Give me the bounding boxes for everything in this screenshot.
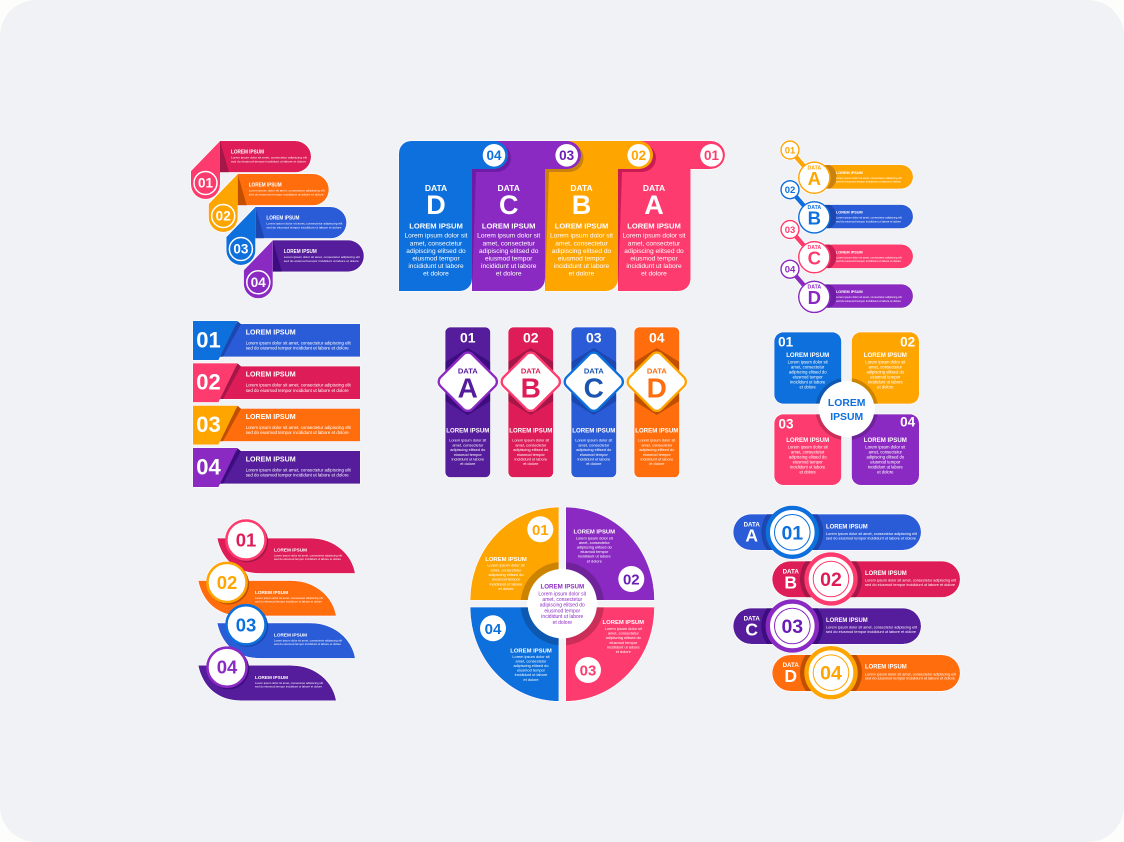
bar D: sed do eiusmod tempor incididunt ut labore et dolore <box>836 299 902 303</box>
square 01 <box>774 332 841 404</box>
square 03: LOREM IPSUM <box>786 437 829 444</box>
ribbon 01 <box>191 141 311 199</box>
center hub: amet, consectetur <box>542 597 583 603</box>
panel: four squares around a circle <box>774 332 919 485</box>
bar A: sed do eiusmod tempor incididunt ut labore et dolore <box>836 180 902 184</box>
column B: DATA <box>570 183 593 193</box>
ribbon 04: sed do eiusmod tempor incididunt ut labore et dolore <box>284 259 359 263</box>
square 02: et dolore <box>877 384 894 389</box>
quadrant 01: eiusmod tempor <box>492 577 521 582</box>
quadrant 02: Lorem ipsum dolor sit <box>576 535 614 540</box>
square 02: eiusmod tempor <box>870 374 901 379</box>
pill 02: Lorem ipsum dolor sit amet, consectetur adipiscing elit <box>865 579 956 583</box>
banner 02: 02 <box>196 370 221 395</box>
bar A: LOREM IPSUM <box>836 171 863 175</box>
column B: amet, consectetur <box>515 442 547 447</box>
banner 01: LOREM IPSUM <box>246 327 296 336</box>
square 01: incididunt ut labore <box>790 379 826 384</box>
quadrant 03: et dolore <box>616 649 631 654</box>
pill 04: DATA <box>783 662 799 669</box>
square 04: Lorem ipsum dolor sit <box>865 444 906 449</box>
bar C: LOREM IPSUM <box>836 250 863 254</box>
ribbon 03: Lorem ipsum dolor sit amet, consectetur adipiscing elit <box>266 222 343 226</box>
ribbon 02 <box>209 174 329 232</box>
swoosh 03 <box>217 605 355 658</box>
column C: 03 <box>559 148 575 163</box>
square 01: eiusmod tempor <box>793 374 823 379</box>
bar D: D <box>808 287 821 308</box>
banner 03: Lorem ipsum dolor sit amet, consectetur adipiscing elit <box>246 425 351 430</box>
column D: amet, consectetur <box>641 442 673 447</box>
square 02: amet, consectetur <box>869 364 903 369</box>
square 01: adipiscing elitsed do <box>789 369 827 374</box>
quadrant 04: incididunt ut labore <box>515 672 547 677</box>
column D: eiusmod tempor <box>412 256 460 262</box>
column C: 03 <box>586 329 602 345</box>
square 04: LOREM IPSUM <box>864 437 907 444</box>
bar B: 02 <box>785 185 795 196</box>
column B: Lorem ipsum dolor sit <box>550 233 613 240</box>
quadrant 02: LOREM IPSUM <box>574 529 615 535</box>
panel: linked circle bars <box>781 141 913 312</box>
quadrant 04: adipiscing elitsed do <box>513 663 549 668</box>
column B: B <box>572 190 591 220</box>
pill 03: LOREM IPSUM <box>826 617 868 624</box>
quadrant 04: LOREM IPSUM <box>510 648 552 654</box>
column A: amet, consectetur <box>628 240 681 247</box>
swoosh 01: 01 <box>236 530 256 550</box>
square 04: eiusmod tempor <box>870 459 901 464</box>
swoosh 04 <box>198 648 336 700</box>
pill 02 <box>772 552 960 606</box>
bar D <box>781 260 913 312</box>
center hub: LOREM IPSUM <box>540 583 584 590</box>
column C <box>562 327 626 477</box>
column A: 01 <box>460 329 476 345</box>
column B: LOREM IPSUM <box>555 221 608 230</box>
column B <box>499 327 563 477</box>
ribbon 03 <box>226 207 346 265</box>
bar A <box>781 141 913 193</box>
center hub: adipiscing elitsed do <box>540 603 585 609</box>
quadrant 03: LOREM IPSUM <box>603 620 644 626</box>
column B: adipiscing elitsed do <box>513 447 548 452</box>
center hub: Lorem ipsum dolor sit <box>538 591 587 597</box>
quadrant 04: et dolore <box>523 677 539 682</box>
square 02: Lorem ipsum dolor sit <box>865 359 906 364</box>
bar C: DATA <box>807 245 821 251</box>
pill 04: sed do eiusmod tempor incididunt ut labore et dolore <box>865 677 955 681</box>
column D: incididunt ut labore <box>408 263 464 270</box>
pill 02: LOREM IPSUM <box>865 570 907 577</box>
ribbon 03: sed do eiusmod tempor incididunt ut labore et dolore <box>266 226 342 230</box>
pill 03: sed do eiusmod tempor incididunt ut labore et dolore <box>826 630 916 634</box>
square 03: eiusmod tempor <box>793 459 823 464</box>
swoosh 04: LOREM IPSUM <box>255 675 288 681</box>
column A <box>618 141 725 291</box>
column B: et dolore <box>523 461 538 466</box>
swoosh 03: LOREM IPSUM <box>274 633 307 639</box>
column C: adipiscing elitsed do <box>576 447 611 452</box>
pill 04: LOREM IPSUM <box>865 664 907 671</box>
column B: B <box>521 372 541 403</box>
column A: eiusmod tempor <box>630 256 678 262</box>
banner 02: LOREM IPSUM <box>246 370 296 379</box>
pill 01: Lorem ipsum dolor sit amet, consectetur adipiscing elit <box>826 532 917 536</box>
square 04: et dolore <box>877 469 894 474</box>
banner 02: Lorem ipsum dolor sit amet, consectetur adipiscing elit <box>246 383 351 388</box>
quadrant 04 <box>470 607 559 701</box>
column D <box>625 327 689 477</box>
banner 02 <box>193 363 360 402</box>
square 04: incididunt ut labore <box>868 464 904 469</box>
column B: adipiscing elitsed do <box>552 248 612 255</box>
pill 03: C <box>745 619 758 639</box>
column D: D <box>426 190 446 220</box>
ribbon 02: 02 <box>216 209 231 224</box>
swoosh 03: Lorem ipsum dolor sit amet, consectetur adipiscing elit <box>274 639 342 643</box>
column C: C <box>584 372 604 403</box>
column A: Lorem ipsum dolor sit <box>449 438 487 443</box>
bar B: Lorem ipsum dolor sit amet, consectetur adipiscing elit <box>836 216 902 220</box>
bar B <box>781 181 913 233</box>
column D: Lorem ipsum dolor sit <box>404 233 468 240</box>
column D: Lorem ipsum dolor sit <box>638 438 676 443</box>
quadrant 04: 04 <box>485 621 502 638</box>
ribbon 03: 03 <box>233 242 249 257</box>
banner 03: 03 <box>196 412 221 437</box>
bar C: sed do eiusmod tempor incididunt ut labore et dolore <box>836 259 902 263</box>
column B: DATA <box>521 367 541 376</box>
ribbon 01: sed do eiusmod tempor incididunt ut labore et dolore <box>231 160 306 164</box>
column D: 04 <box>649 329 665 345</box>
bar D: Lorem ipsum dolor sit amet, consectetur adipiscing elit <box>836 295 902 299</box>
column A: adipiscing elitsed do <box>624 248 684 255</box>
banner 03: LOREM IPSUM <box>246 412 296 421</box>
square 01: et dolore <box>800 384 817 389</box>
column C: LOREM IPSUM <box>572 428 615 435</box>
square 03: adipiscing elitsed do <box>789 454 827 459</box>
ribbon 01: 01 <box>198 176 213 191</box>
quadrant 04: eiusmod tempor <box>517 668 546 673</box>
column D: incididunt ut labore <box>640 456 673 462</box>
bar A: DATA <box>807 165 821 171</box>
column C: LOREM IPSUM <box>482 221 535 230</box>
quadrant 01: adipiscing elitsed do <box>488 572 524 577</box>
square 04: adipiscing elitsed do <box>866 454 905 459</box>
bar D: 04 <box>785 265 796 276</box>
bar A: A <box>808 168 821 189</box>
ribbon 01: LOREM IPSUM <box>231 150 264 156</box>
ribbon 02: LOREM IPSUM <box>249 182 282 188</box>
square 04: amet, consectetur <box>869 449 903 454</box>
column B: et dolore <box>569 271 595 278</box>
bar C: C <box>808 248 821 268</box>
square 03: et dolore <box>800 469 817 474</box>
square 03: 03 <box>778 416 794 431</box>
pill 02: B <box>784 572 797 592</box>
banner 03 <box>193 406 360 445</box>
center hub: incididunt ut labore <box>541 614 583 620</box>
quadrant 01 <box>470 507 559 600</box>
column A: incididunt ut labore <box>626 263 682 270</box>
column B: eiusmod tempor <box>558 256 606 262</box>
square 03 <box>774 414 841 485</box>
banner 04: LOREM IPSUM <box>246 454 296 463</box>
pill 01: 01 <box>781 522 803 544</box>
panel: numbered banner list <box>193 321 360 487</box>
swoosh 01: sed do eiusmod tempor incididunt ut labore et dolore <box>274 557 341 561</box>
column D: LOREM IPSUM <box>409 221 463 230</box>
quadrant 03: adipiscing elitsed do <box>606 635 641 640</box>
square 02 <box>852 332 919 404</box>
column A: 01 <box>704 148 719 163</box>
ribbon 02: sed do eiusmod tempor incididunt ut labore et dolore <box>249 193 324 197</box>
column A: incididunt ut labore <box>451 456 484 462</box>
column D: eiusmod tempor <box>643 452 671 457</box>
pill 04: 04 <box>820 663 842 685</box>
quadrant 03: amet, consectetur <box>608 631 639 636</box>
quadrant 04: Lorem ipsum dolor sit <box>512 654 551 659</box>
column D: adipiscing elitsed do <box>639 447 674 452</box>
column C: Lorem ipsum dolor sit <box>477 233 540 240</box>
center hub: et dolore <box>553 620 572 626</box>
ribbon 04: Lorem ipsum dolor sit amet, consectetur adipiscing elit <box>284 255 360 259</box>
column C: DATA <box>584 367 604 376</box>
pill 01: DATA <box>744 522 760 529</box>
column B: 02 <box>523 329 539 345</box>
quadrant 02 <box>566 507 654 600</box>
bar A: 01 <box>785 146 796 156</box>
banner 02: sed do eiusmod tempor incididunt ut labore et dolore <box>246 388 349 393</box>
swoosh 01: Lorem ipsum dolor sit amet, consectetur adipiscing elit <box>274 554 342 558</box>
column C: Lorem ipsum dolor sit <box>575 438 613 443</box>
column D: et dolore <box>423 271 449 278</box>
banner 01: 01 <box>196 327 221 352</box>
pill 01: A <box>745 526 758 546</box>
square 04 <box>852 414 919 485</box>
swoosh 04: sed do eiusmod tempor incididunt ut labore et dolore <box>255 684 322 688</box>
square 01: Lorem ipsum dolor sit <box>788 359 829 364</box>
banner 01 <box>193 321 360 360</box>
square 01: amet, consectetur <box>791 364 825 369</box>
column B: incididunt ut labore <box>514 456 547 462</box>
pill 03: Lorem ipsum dolor sit amet, consectetur adipiscing elit <box>826 626 917 630</box>
quadrant 03: 03 <box>580 662 596 680</box>
quadrant 02: incididunt ut labore <box>578 554 611 559</box>
column C <box>472 141 581 291</box>
quadrant 04: amet, consectetur <box>516 659 547 664</box>
column C: incididunt ut labore <box>481 263 537 270</box>
ribbon 04: 04 <box>251 275 266 290</box>
column A: et dolore <box>641 271 667 278</box>
swoosh 02: sed do eiusmod tempor incididunt ut labore et dolore <box>255 600 322 604</box>
column A: Lorem ipsum dolor sit <box>622 233 686 240</box>
column C: eiusmod tempor <box>485 256 533 262</box>
square 02: adipiscing elitsed do <box>866 369 905 374</box>
banner 04: sed do eiusmod tempor incididunt ut labore et dolore <box>246 472 349 478</box>
column A: adipiscing elitsed do <box>450 447 485 452</box>
column A: eiusmod tempor <box>454 452 482 457</box>
pill 01 <box>733 505 922 560</box>
swoosh 02 <box>198 563 336 616</box>
banner 04 <box>193 448 360 487</box>
column A: et dolore <box>460 461 475 466</box>
quadrant 01: amet, consectetur <box>491 567 522 572</box>
center circle <box>815 378 878 440</box>
square 02: 02 <box>900 335 915 350</box>
center hub <box>521 562 604 645</box>
square 02: LOREM IPSUM <box>864 352 907 359</box>
bar C <box>781 220 913 273</box>
panel: folded ribbon list <box>191 141 364 298</box>
center circle: LOREM <box>828 398 865 409</box>
column B: amet, consectetur <box>555 240 609 247</box>
pill 04 <box>772 646 960 700</box>
column D: D <box>647 372 667 403</box>
swoosh 01 <box>217 520 355 573</box>
center circle: IPSUM <box>830 412 863 423</box>
pill 02: sed do eiusmod tempor incididunt ut labore et dolore <box>865 583 955 587</box>
quadrant 03: incididunt ut labore <box>607 644 640 649</box>
pill 04: D <box>784 666 797 686</box>
square 04: 04 <box>900 415 916 430</box>
column D <box>399 141 508 291</box>
banner 04: Lorem ipsum dolor sit amet, consectetur adipiscing elit <box>246 467 351 472</box>
bar D: LOREM IPSUM <box>836 290 863 294</box>
bar B: DATA <box>807 205 821 211</box>
square 01: 01 <box>778 335 794 350</box>
quadrant 02: et dolore <box>587 558 602 563</box>
quadrant 01: et dolore <box>498 586 514 591</box>
column C: amet, consectetur <box>482 240 536 247</box>
column B <box>545 141 653 291</box>
square 03: amet, consectetur <box>791 449 825 454</box>
panel: swoosh banners with circles <box>198 520 355 700</box>
banner 01: sed do eiusmod tempor incididunt ut labore et dolore <box>246 346 349 350</box>
bar D: DATA <box>807 284 821 290</box>
panel: pill bars with target circles <box>733 501 960 704</box>
pill 04: Lorem ipsum dolor sit amet, consectetur adipiscing elit <box>865 672 956 676</box>
column A: DATA <box>458 367 478 376</box>
column C: adipiscing elitsed do <box>479 248 539 255</box>
column A: LOREM IPSUM <box>446 428 489 435</box>
pill 02: 02 <box>820 569 842 591</box>
quadrant 03: eiusmod tempor <box>609 640 638 645</box>
quadrant 02: eiusmod tempor <box>580 549 609 554</box>
column C: DATA <box>498 183 520 193</box>
column A: amet, consectetur <box>452 442 484 447</box>
panel: diamond columns <box>436 327 689 477</box>
column D: amet, consectetur <box>410 240 463 247</box>
quadrant 02: amet, consectetur <box>579 540 610 545</box>
column D: DATA <box>425 183 447 193</box>
quadrant 01: LOREM IPSUM <box>485 557 527 563</box>
panel: overlapping tabbed columns <box>399 141 725 291</box>
bar A: Lorem ipsum dolor sit amet, consectetur adipiscing elit <box>836 176 902 180</box>
column A: A <box>458 372 478 403</box>
column D: 04 <box>486 148 502 163</box>
quadrant 01: incididunt ut labore <box>490 581 522 586</box>
square 01: LOREM IPSUM <box>786 352 829 359</box>
column A: LOREM IPSUM <box>627 221 681 230</box>
swoosh 04: 04 <box>217 657 238 678</box>
ribbon 02: Lorem ipsum dolor sit amet, consectetur adipiscing elit <box>249 188 325 192</box>
bar C: 03 <box>785 225 795 236</box>
ribbon 04 <box>244 240 364 298</box>
square 02: incididunt ut labore <box>868 379 904 384</box>
quadrant 01: 01 <box>532 522 549 539</box>
pill 03 <box>733 599 922 653</box>
quadrant 02: adipiscing elitsed do <box>577 544 612 550</box>
quadrant 02: 02 <box>623 572 640 588</box>
pill 03: DATA <box>744 615 760 622</box>
quadrant 03 <box>566 607 654 701</box>
bar B: sed do eiusmod tempor incididunt ut labore et dolore <box>836 219 902 223</box>
panel: segmented circle <box>470 507 654 701</box>
quadrant 03: Lorem ipsum dolor sit <box>605 626 643 631</box>
column C: et dolore <box>496 271 522 278</box>
column D: LOREM IPSUM <box>635 428 678 435</box>
column D: DATA <box>647 367 667 376</box>
ribbon 01: Lorem ipsum dolor sit amet, consectetur adipiscing elit <box>231 156 307 160</box>
column C: amet, consectetur <box>578 442 610 447</box>
swoosh 02: LOREM IPSUM <box>255 590 288 596</box>
column A <box>436 327 500 477</box>
banner 04: 04 <box>196 454 221 479</box>
column A: DATA <box>643 183 665 193</box>
column C: C <box>499 190 518 220</box>
swoosh 03: 03 <box>236 614 256 635</box>
pill 03: 03 <box>781 616 803 638</box>
column D: adipiscing elitsed do <box>406 248 466 255</box>
column B: LOREM IPSUM <box>509 428 552 435</box>
pill 02: DATA <box>783 568 799 575</box>
column B: incididunt ut labore <box>554 263 610 270</box>
bar B: B <box>808 208 821 229</box>
pill 01: sed do eiusmod tempor incididunt ut labore et dolore <box>826 536 916 540</box>
pill 01: LOREM IPSUM <box>826 523 868 530</box>
column D: et dolore <box>649 461 664 466</box>
square 03: incididunt ut labore <box>790 464 826 469</box>
bar C: Lorem ipsum dolor sit amet, consectetur adipiscing elit <box>836 256 902 260</box>
square 03: Lorem ipsum dolor sit <box>788 444 829 449</box>
banner 01: Lorem ipsum dolor sit amet, consectetur adipiscing elit <box>246 340 351 345</box>
swoosh 02: 02 <box>217 572 237 593</box>
column C: eiusmod tempor <box>580 452 608 457</box>
column B: 02 <box>631 148 646 163</box>
ribbon 04: LOREM IPSUM <box>284 249 317 255</box>
quadrant 01: Lorem ipsum dolor sit <box>487 563 526 568</box>
swoosh 01: LOREM IPSUM <box>274 548 307 554</box>
swoosh 03: sed do eiusmod tempor incididunt ut labore et dolore <box>274 642 341 646</box>
column C: et dolore <box>586 461 601 466</box>
swoosh 02: Lorem ipsum dolor sit amet, consectetur adipiscing elit <box>255 596 323 600</box>
center hub: eiusmod tempor <box>544 608 581 614</box>
column A: A <box>644 190 664 220</box>
bar B: LOREM IPSUM <box>836 211 863 215</box>
swoosh 04: Lorem ipsum dolor sit amet, consectetur adipiscing elit <box>255 681 323 685</box>
column C: incididunt ut labore <box>577 456 610 462</box>
ribbon 03: LOREM IPSUM <box>266 216 299 222</box>
column B: eiusmod tempor <box>517 452 545 457</box>
column B: Lorem ipsum dolor sit <box>512 438 550 443</box>
banner 03: sed do eiusmod tempor incididunt ut labore et dolore <box>246 430 349 435</box>
